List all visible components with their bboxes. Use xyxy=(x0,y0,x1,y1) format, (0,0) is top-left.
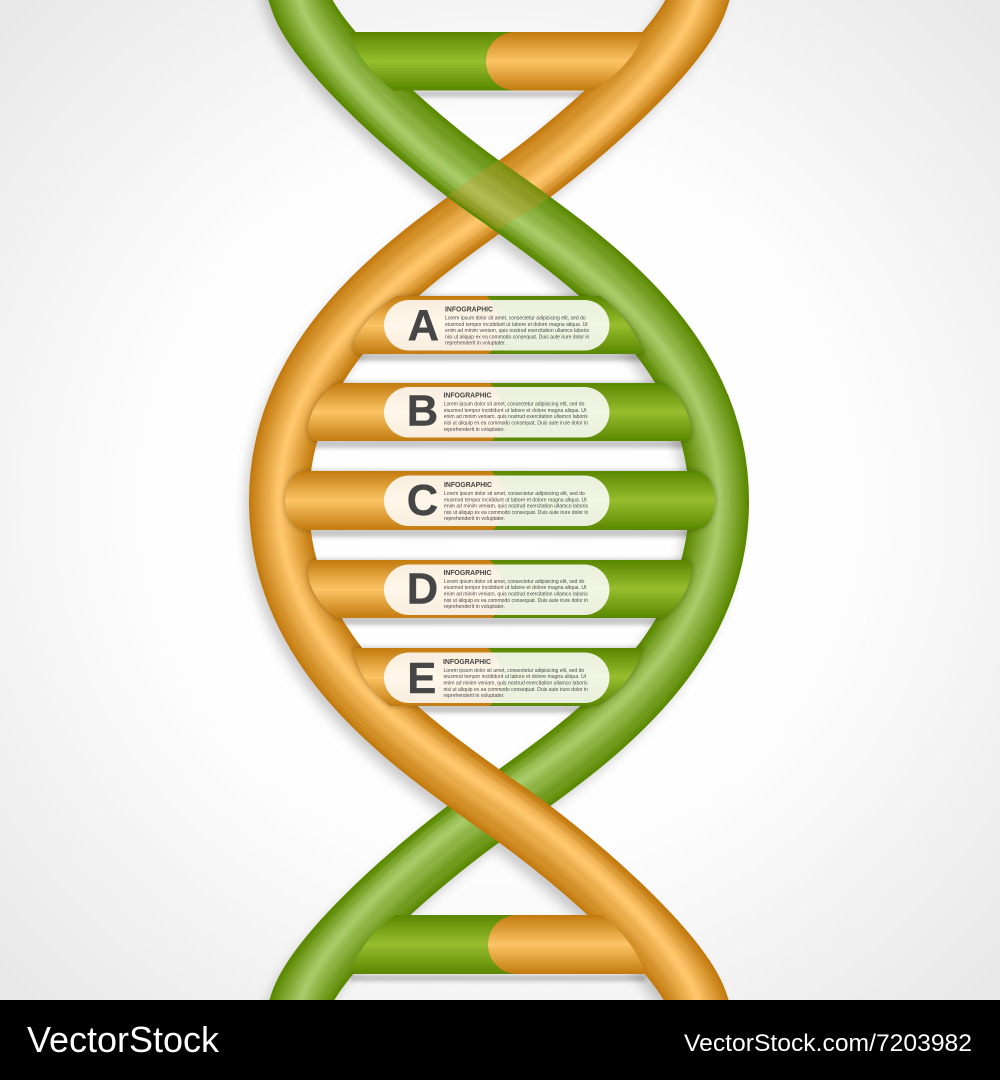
label B: enim ad minim veniam, quis nostrud exercitation ullamco laboris xyxy=(444,414,588,420)
label A: nisi ut aliquip ex ea commodo consequat. Duis aute irure dolor in xyxy=(445,334,589,340)
label E: nisi ut aliquip ex ea commodo consequat. Duis aute irure dolor in xyxy=(444,687,588,693)
rung shadows on strands xyxy=(285,296,715,706)
label A: eiusmod tempor incididunt ut labore et dolore magna aliqua. Ut xyxy=(445,322,588,328)
rung B xyxy=(308,383,692,441)
label D: eiusmod tempor incididunt ut labore et dolore magna aliqua. Ut xyxy=(444,585,587,591)
label A: Lorem ipsum dolor sit amet, consectetur adipisicing elit, sed do xyxy=(445,316,586,322)
label D: Lorem ipsum dolor sit amet, consectetur adipisicing elit, sed do xyxy=(444,579,585,585)
lower orange strand xyxy=(279,500,707,1030)
label E: eiusmod tempor incididunt ut labore et dolore magna aliqua. Ut xyxy=(444,674,587,680)
label D: D xyxy=(407,566,438,614)
label A: A xyxy=(408,302,439,350)
bottom rung xyxy=(350,915,646,974)
footer logo text: VectorStock xyxy=(27,1019,220,1060)
label B: B xyxy=(407,388,438,436)
label C xyxy=(384,476,610,526)
label E: enim ad minim veniam, quis nostrud exercitation ullamco laboris xyxy=(444,680,588,686)
rung C xyxy=(285,471,715,530)
label E: INFOGRAPHIC xyxy=(443,657,491,666)
rung shadows xyxy=(305,91,695,981)
label A: INFOGRAPHIC xyxy=(445,304,493,314)
rung E xyxy=(352,648,643,706)
lower green strand xyxy=(291,500,719,1030)
rung D xyxy=(308,560,692,618)
label D: INFOGRAPHIC xyxy=(444,568,492,577)
label D: enim ad minim veniam, quis nostrud exercitation ullamco laboris xyxy=(444,592,588,598)
label E xyxy=(384,652,610,703)
label A xyxy=(384,300,610,350)
label C: reprehenderit in voluptater. xyxy=(444,516,505,522)
label B: eiusmod tempor incididunt ut labore et dolore magna aliqua. Ut xyxy=(444,408,587,414)
label D: nisi ut aliquip ex ea commodo consequat. Duis aute irure dolor in xyxy=(444,598,588,604)
upper orange strand xyxy=(279,0,707,503)
label B: nisi ut aliquip ex ea commodo consequat. Duis aute irure dolor in xyxy=(444,420,588,426)
label B: Lorem ipsum dolor sit amet, consectetur adipisicing elit, sed do xyxy=(444,402,584,408)
label E: Lorem ipsum dolor sit amet, consectetur adipisicing elit, sed do xyxy=(444,668,584,674)
label C: eiusmod tempor incididunt ut labore et dolore magna aliqua. Ut xyxy=(444,497,587,503)
label C: Lorem ipsum dolor sit amet, consectetur adipisicing elit, sed do xyxy=(444,491,585,497)
label E: E xyxy=(407,655,436,703)
label B xyxy=(384,387,610,438)
dna helix xyxy=(273,0,719,1039)
label D: reprehenderit in voluptater. xyxy=(444,604,505,610)
label C: C xyxy=(407,477,438,525)
footer bar xyxy=(0,1000,1000,1080)
label E: reprehenderit in voluptater. xyxy=(444,693,504,699)
strand shadows xyxy=(273,0,713,1039)
label C: nisi ut aliquip ex ea commodo consequat. Duis aute irure dolor in xyxy=(444,510,588,516)
crossing overlap tint xyxy=(448,160,550,230)
top rung xyxy=(349,32,645,90)
label C: INFOGRAPHIC xyxy=(444,480,492,489)
rung A xyxy=(352,296,645,354)
label B: reprehenderit in voluptater. xyxy=(444,427,505,433)
label D xyxy=(384,564,610,615)
footer url text: VectorStock.com/7203982 xyxy=(684,1030,972,1057)
upper green strand xyxy=(291,0,719,503)
label A: enim ad minim veniam, quis nostrud exercitation ullamco laboris xyxy=(445,328,589,334)
label B: INFOGRAPHIC xyxy=(444,390,492,400)
label C: enim ad minim veniam, quis nostrud exercitation ullamco laboris xyxy=(444,504,588,510)
label A: reprehenderit in voluptater. xyxy=(445,341,506,347)
